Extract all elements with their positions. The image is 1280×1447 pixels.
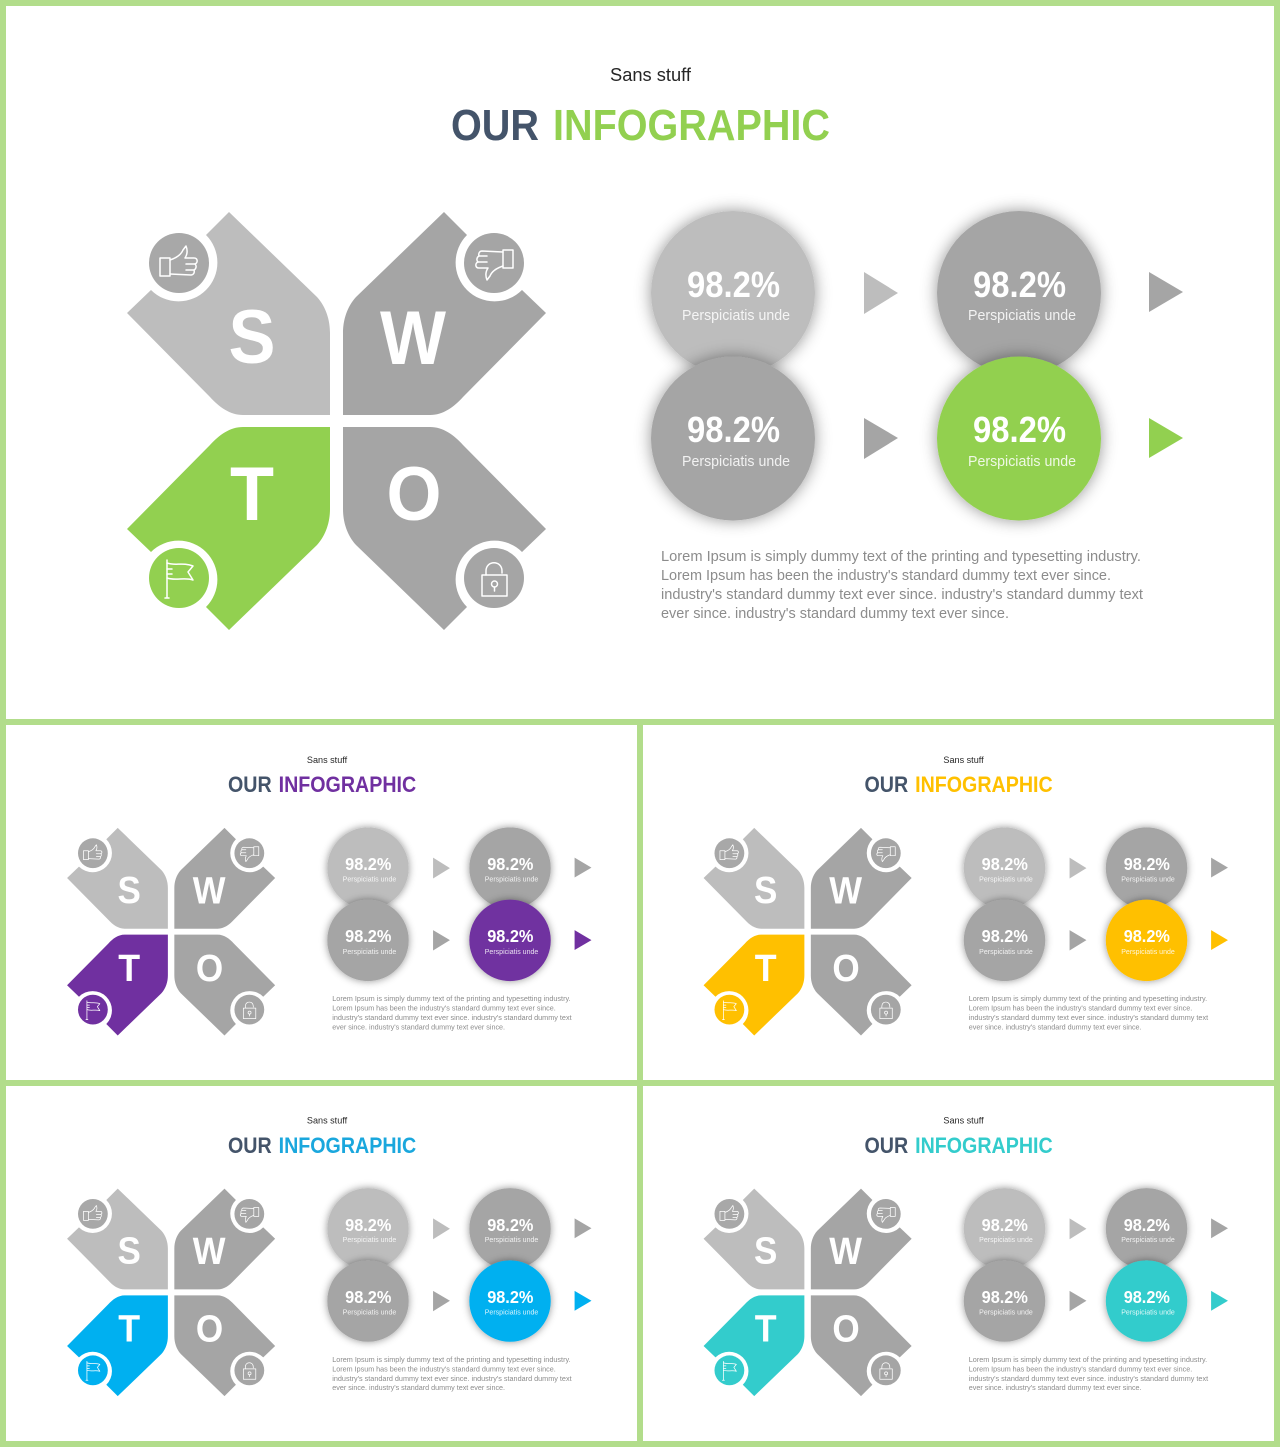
subtitle: Sans stuff bbox=[307, 755, 348, 765]
slide: blue variant bbox=[67, 1116, 591, 1396]
body text: industry's standard dummy text ever since. industry's standard dummy text bbox=[332, 1374, 573, 1383]
petal W: W bbox=[380, 296, 446, 381]
petal S: S bbox=[754, 1230, 777, 1272]
stat 3 bbox=[964, 1260, 1045, 1342]
petal T bbox=[127, 427, 330, 630]
stat 1 bbox=[327, 1188, 409, 1270]
body text: Lorem Ipsum is simply dummy text of the printing and typesetting industry. bbox=[332, 994, 571, 1003]
panel: purple slide background bbox=[6, 725, 637, 1080]
body text bbox=[332, 1355, 573, 1392]
petal T: T bbox=[230, 452, 274, 537]
body text bbox=[661, 548, 1144, 622]
body text: ever since. industry's standard dummy text ever since. bbox=[332, 1383, 505, 1392]
petal O bbox=[811, 935, 912, 1035]
stat 3 bbox=[651, 356, 815, 520]
petal T bbox=[704, 935, 804, 1035]
stat 3: Perspiciatis unde bbox=[343, 947, 396, 956]
stat 4 highlighted: Perspiciatis unde bbox=[1121, 947, 1175, 956]
panel: blue slide background bbox=[6, 1086, 637, 1441]
stat 3 bbox=[964, 900, 1045, 981]
stat 2: 98.2% bbox=[487, 854, 533, 874]
petal O bbox=[811, 1295, 912, 1396]
stat 4 highlighted bbox=[1106, 1260, 1187, 1342]
body text: industry's standard dummy text ever since. industry's standard dummy text bbox=[661, 586, 1144, 603]
title: INFOGRAPHIC bbox=[553, 101, 830, 150]
body text: industry's standard dummy text ever since. industry's standard dummy text bbox=[969, 1374, 1209, 1383]
petal T: T bbox=[118, 1308, 140, 1350]
stat 2: 98.2% bbox=[1124, 1215, 1170, 1235]
stat 1: Perspiciatis unde bbox=[343, 1235, 396, 1244]
stat 3: Perspiciatis unde bbox=[979, 947, 1033, 956]
stat 4 highlighted: Perspiciatis unde bbox=[485, 1308, 538, 1317]
subtitle: Sans stuff bbox=[610, 65, 692, 85]
petal T: T bbox=[755, 947, 777, 989]
arrows bbox=[433, 1218, 591, 1311]
body text: ever since. industry's standard dummy text ever since. bbox=[969, 1383, 1142, 1392]
petal S bbox=[67, 1189, 168, 1289]
petal O bbox=[174, 935, 275, 1035]
SWOT diagram bbox=[67, 1189, 275, 1396]
stat 1: Perspiciatis unde bbox=[979, 1235, 1033, 1244]
stat 4 highlighted: 98.2% bbox=[487, 1287, 533, 1307]
stat 3: 98.2% bbox=[345, 1287, 391, 1307]
SWOT diagram bbox=[127, 212, 546, 630]
stat 4 highlighted bbox=[469, 1260, 551, 1342]
petal O: O bbox=[196, 947, 223, 989]
stat 1 bbox=[964, 827, 1045, 909]
slide: yellow variant bbox=[704, 755, 1228, 1035]
petal O: O bbox=[386, 452, 442, 537]
stat 2 bbox=[1106, 1188, 1187, 1270]
body text: ever since. industry's standard dummy text ever since. bbox=[969, 1022, 1142, 1031]
body text: ever since. industry's standard dummy text ever since. bbox=[661, 605, 1009, 622]
SWOT diagram bbox=[704, 828, 912, 1035]
title: OUR bbox=[864, 1133, 908, 1158]
petal T bbox=[67, 935, 168, 1035]
panel: teal slide background bbox=[643, 1086, 1274, 1441]
stat 4 highlighted: 98.2% bbox=[487, 926, 533, 946]
stat 2: Perspiciatis unde bbox=[485, 875, 538, 884]
petal S bbox=[127, 212, 330, 415]
stat 3: 98.2% bbox=[982, 1287, 1028, 1307]
slide: teal variant bbox=[704, 1116, 1228, 1396]
stat 1: 98.2% bbox=[982, 1215, 1028, 1235]
subtitle: Sans stuff bbox=[943, 755, 984, 765]
petal T bbox=[67, 1295, 168, 1396]
title bbox=[864, 772, 1053, 797]
petal O: O bbox=[196, 1308, 223, 1350]
body text: ever since. industry's standard dummy text ever since. bbox=[332, 1022, 505, 1031]
stat 2 bbox=[469, 1188, 551, 1270]
petal O: O bbox=[832, 947, 860, 989]
title: OUR bbox=[451, 101, 539, 150]
slide: purple variant bbox=[67, 755, 591, 1035]
petal W: W bbox=[829, 869, 862, 911]
petal S: S bbox=[117, 1230, 141, 1272]
title: INFOGRAPHIC bbox=[279, 772, 416, 797]
body text: Lorem Ipsum has been the industry's standard dummy text ever since. bbox=[661, 567, 1111, 584]
title bbox=[228, 1133, 416, 1158]
stat 1: 98.2% bbox=[687, 264, 780, 305]
title: INFOGRAPHIC bbox=[279, 1133, 416, 1158]
petal S: S bbox=[228, 295, 276, 380]
stat 1 bbox=[327, 827, 409, 909]
arrows bbox=[864, 272, 1183, 459]
petal W: W bbox=[829, 1230, 862, 1272]
arrows bbox=[1070, 1218, 1228, 1311]
body text: Lorem Ipsum is simply dummy text of the printing and typesetting industry. bbox=[969, 1355, 1207, 1364]
stat 3: Perspiciatis unde bbox=[682, 453, 790, 470]
petal T bbox=[704, 1295, 804, 1396]
body text bbox=[969, 994, 1209, 1031]
petal W bbox=[343, 212, 546, 415]
petal S: S bbox=[117, 869, 141, 911]
petal W: W bbox=[193, 1230, 226, 1272]
title bbox=[451, 101, 830, 150]
stat 4 highlighted: Perspiciatis unde bbox=[968, 453, 1076, 470]
stat 1: 98.2% bbox=[345, 854, 391, 874]
stat circles bbox=[327, 1188, 551, 1342]
stat 3 bbox=[327, 1260, 409, 1342]
stat 2: 98.2% bbox=[1124, 854, 1170, 874]
arrows bbox=[433, 858, 591, 951]
title: INFOGRAPHIC bbox=[915, 1133, 1053, 1158]
arrows bbox=[1070, 858, 1228, 951]
stat 3: 98.2% bbox=[982, 926, 1028, 946]
stat 3 bbox=[327, 900, 409, 981]
stat 4 highlighted: 98.2% bbox=[973, 409, 1066, 450]
stat 4 highlighted bbox=[937, 356, 1101, 520]
stat 2 bbox=[1106, 827, 1187, 909]
petal W bbox=[811, 828, 912, 929]
stat 4 highlighted: 98.2% bbox=[1124, 1287, 1170, 1307]
panel: main slide background bbox=[6, 6, 1274, 719]
subtitle: Sans stuff bbox=[307, 1116, 348, 1126]
petal S bbox=[704, 828, 804, 929]
petal O bbox=[174, 1295, 275, 1396]
stat 3: 98.2% bbox=[345, 926, 391, 946]
stat 2: Perspiciatis unde bbox=[968, 307, 1076, 324]
title bbox=[864, 1133, 1053, 1158]
stat 1 bbox=[964, 1188, 1045, 1270]
body text: industry's standard dummy text ever since. industry's standard dummy text bbox=[969, 1013, 1209, 1022]
stat 3: Perspiciatis unde bbox=[343, 1308, 396, 1317]
stat circles bbox=[327, 827, 551, 981]
petal O: O bbox=[832, 1308, 860, 1350]
body text: Lorem Ipsum has been the industry's standard dummy text ever since. bbox=[969, 1364, 1192, 1373]
body text: Lorem Ipsum has been the industry's standard dummy text ever since. bbox=[969, 1004, 1192, 1013]
panel: yellow slide background bbox=[643, 725, 1274, 1080]
body text: Lorem Ipsum has been the industry's standard dummy text ever since. bbox=[332, 1004, 556, 1013]
stat 1: Perspiciatis unde bbox=[682, 307, 790, 324]
slide: green main bbox=[127, 65, 1183, 630]
stat 2 bbox=[469, 827, 551, 909]
petal W bbox=[174, 828, 275, 929]
stat 4 highlighted: Perspiciatis unde bbox=[1121, 1308, 1175, 1317]
body text bbox=[969, 1355, 1209, 1392]
stat 1: 98.2% bbox=[982, 854, 1028, 874]
SWOT diagram bbox=[704, 1189, 912, 1396]
body text bbox=[332, 994, 573, 1031]
petal S: S bbox=[754, 869, 777, 911]
stat 4 highlighted bbox=[469, 900, 551, 981]
title: OUR bbox=[228, 772, 272, 797]
petal W bbox=[174, 1189, 275, 1289]
stat 2: Perspiciatis unde bbox=[485, 1235, 538, 1244]
stat 1 bbox=[651, 211, 815, 375]
stat 1: Perspiciatis unde bbox=[343, 875, 396, 884]
stat 2: 98.2% bbox=[973, 264, 1066, 305]
stat 2: Perspiciatis unde bbox=[1121, 1235, 1175, 1244]
SWOT diagram bbox=[67, 828, 275, 1035]
title: OUR bbox=[864, 772, 908, 797]
petal O bbox=[343, 427, 546, 630]
petal S bbox=[67, 828, 168, 929]
body text: industry's standard dummy text ever since. industry's standard dummy text bbox=[332, 1013, 573, 1022]
body text: Lorem Ipsum is simply dummy text of the printing and typesetting industry. bbox=[661, 548, 1141, 565]
stat 4 highlighted bbox=[1106, 900, 1187, 981]
title bbox=[228, 772, 416, 797]
stat 1: 98.2% bbox=[345, 1215, 391, 1235]
stat 2: 98.2% bbox=[487, 1215, 533, 1235]
stat circles bbox=[964, 1188, 1187, 1342]
petal W bbox=[811, 1189, 912, 1289]
title: OUR bbox=[228, 1133, 272, 1158]
petal S bbox=[704, 1189, 804, 1289]
body text: Lorem Ipsum is simply dummy text of the printing and typesetting industry. bbox=[969, 994, 1207, 1003]
stat circles bbox=[964, 827, 1187, 981]
stat circles bbox=[651, 211, 1101, 520]
stat 2: Perspiciatis unde bbox=[1121, 875, 1175, 884]
petal W: W bbox=[193, 869, 226, 911]
stat 4 highlighted: 98.2% bbox=[1124, 926, 1170, 946]
stat 3: 98.2% bbox=[687, 409, 780, 450]
body text: Lorem Ipsum has been the industry's standard dummy text ever since. bbox=[332, 1364, 556, 1373]
stat 4 highlighted: Perspiciatis unde bbox=[485, 947, 538, 956]
stat 2 bbox=[937, 211, 1101, 375]
subtitle: Sans stuff bbox=[943, 1116, 984, 1126]
body text: Lorem Ipsum is simply dummy text of the printing and typesetting industry. bbox=[332, 1355, 571, 1364]
stat 1: Perspiciatis unde bbox=[979, 875, 1033, 884]
petal T: T bbox=[118, 947, 140, 989]
petal T: T bbox=[755, 1308, 777, 1350]
stat 3: Perspiciatis unde bbox=[979, 1308, 1033, 1317]
title: INFOGRAPHIC bbox=[915, 772, 1053, 797]
